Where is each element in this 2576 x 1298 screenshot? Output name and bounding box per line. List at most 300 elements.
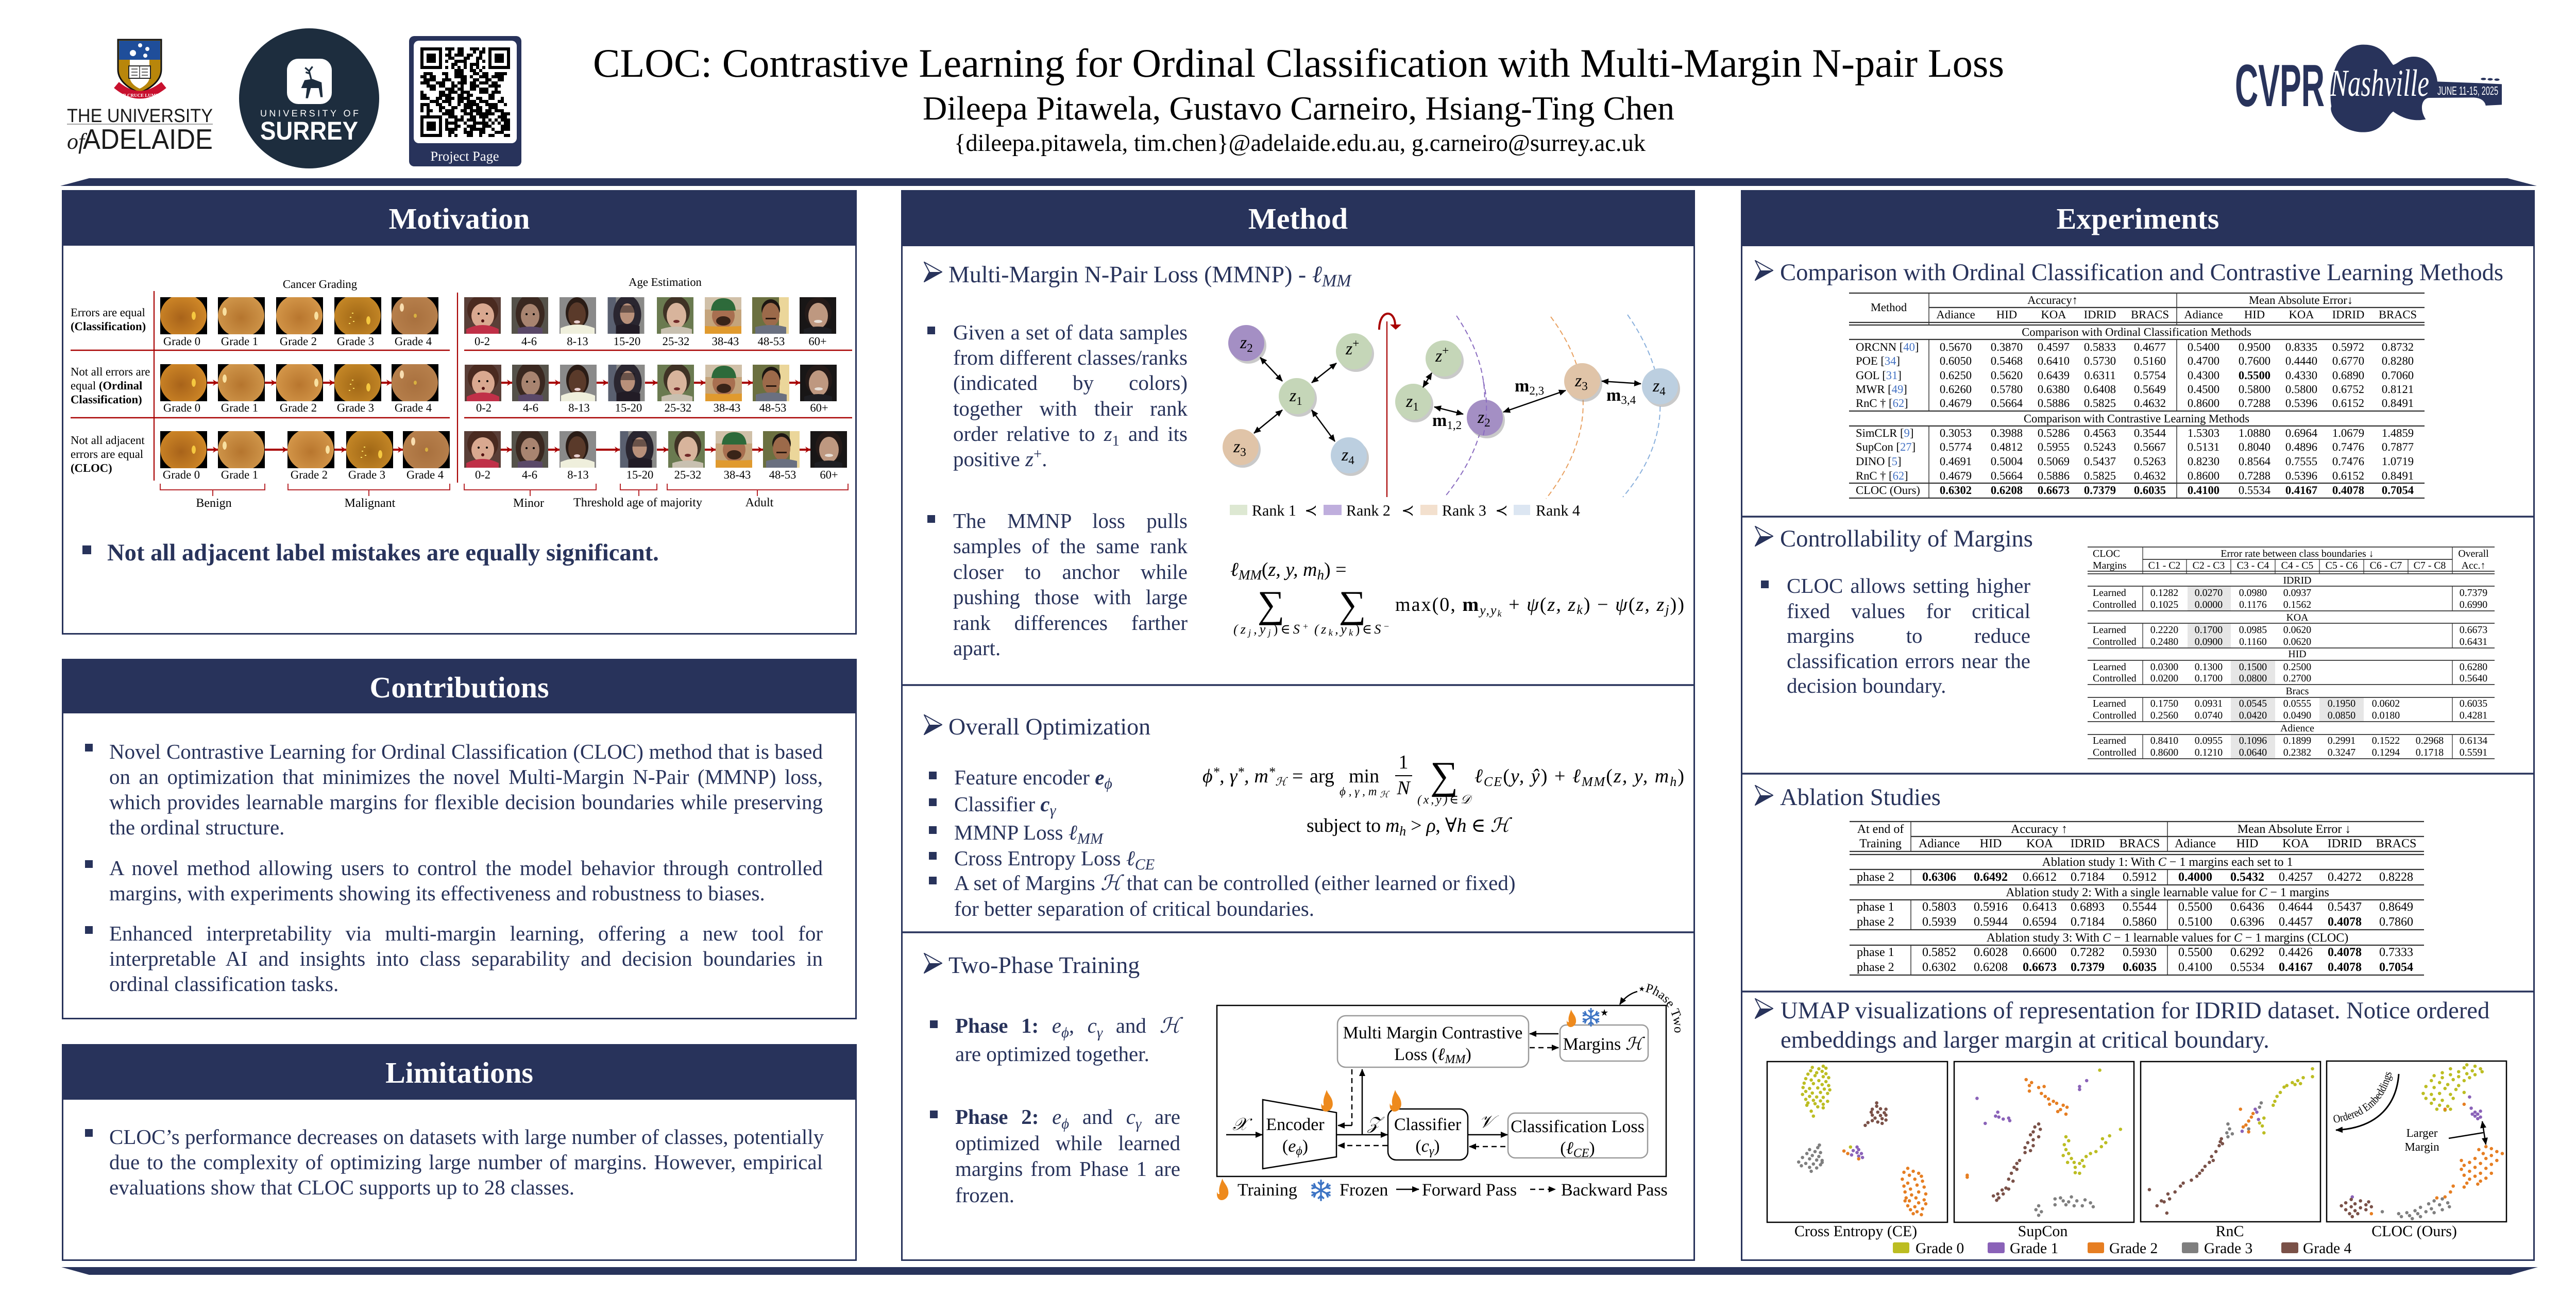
list: optimization components: MM	[1077, 830, 1104, 847]
table: error rate between class boundaries: 0.2968	[2416, 735, 2444, 746]
row labels: Classification)	[71, 393, 142, 406]
image labels: Grade 1	[221, 468, 258, 481]
equation: overall objective: ℓ	[1475, 765, 1483, 787]
equation: overall objective: ρ, ∀h ∈ ℋ	[1426, 815, 1510, 836]
motivation figure: cancer grading and age estimation	[71, 276, 852, 566]
text: MMNP bullet 2	[953, 508, 1188, 661]
table: ablation studies: 0.6612	[2023, 870, 2057, 884]
table: comparison	[1849, 293, 2425, 498]
table: ablation studies: 0.6594	[2023, 915, 2057, 929]
table: error rate between class boundaries: KOA	[2286, 612, 2309, 623]
brace labels: Malignant	[345, 497, 396, 510]
text: controllability bullet: classification errors near the	[1787, 649, 2030, 673]
table: comparison: 1.0880	[2239, 426, 2270, 439]
table: error rate between class boundaries: 0.8410	[2150, 735, 2178, 746]
table: comparison: 0.4632	[2134, 397, 2166, 409]
equation: MMNP loss: +	[1302, 621, 1309, 631]
equation: overall objective	[1202, 752, 1684, 839]
table: comparison: MWR [49]	[1856, 383, 1907, 396]
diagram: samples before loss: 3	[1240, 446, 1246, 458]
table: comparison: 0.9500	[2239, 340, 2270, 353]
table: error rate between class boundaries: 0.0740	[2195, 710, 2223, 721]
text: contribution 2: A novel method allowing users to control the model behavior through controlled	[109, 856, 823, 880]
equation: overall objective: CE	[1484, 774, 1502, 789]
table: ablation studies: 0.7184	[2071, 870, 2105, 884]
emails: {dileepa.pitawela, tim.chen}@adelaide.edu.au, g.carneiro@surrey.ac.uk	[954, 130, 1646, 157]
list: optimization components: Classifier c	[954, 792, 1050, 816]
equation: MMNP loss: ,y	[1335, 622, 1347, 637]
logo: University of Surrey	[239, 28, 379, 168]
table: ablation studies: 0.4078	[2328, 946, 2362, 959]
heading: contributions	[62, 659, 857, 713]
table: error rate between class boundaries: 0.0931	[2195, 698, 2223, 709]
text: contribution 1: Novel Contrastive Learning for Ordinal Classification (CLOC) method that is based	[109, 740, 823, 763]
flow diagram: two-phase training: Margins ℋ	[1563, 1035, 1646, 1054]
table: ablation studies: BRACS	[2376, 837, 2416, 850]
subheading: UMAP visualizations	[1755, 997, 2489, 1053]
table: error rate between class boundaries: 0.1700	[2195, 624, 2223, 636]
experiments content	[1741, 190, 2535, 1261]
table: comparison: 0.6152	[2332, 397, 2364, 409]
text: contribution 3: Enhanced interpretability via multi-margin learning, offering a new tool for	[109, 921, 823, 945]
logo: CVPR Nashville: JUNE 11-15, 2025	[2437, 84, 2498, 97]
table: comparison: 0.4500	[2188, 383, 2219, 396]
equation: overall objective: arg	[1310, 765, 1334, 787]
table: comparison: 0.6035	[2134, 484, 2166, 497]
table: comparison: 1.0679	[2332, 426, 2364, 439]
text: MMNP bullet 1: (indicated by colors)	[953, 371, 1188, 395]
table: comparison: 0.5780	[1991, 383, 2023, 396]
table: error rate between class boundaries: 0.0200	[2150, 673, 2178, 684]
table: comparison: 1.4859	[2382, 426, 2414, 439]
table: comparison: 0.7476	[2332, 455, 2364, 468]
equation: overall objective: *	[1238, 764, 1244, 779]
table: comparison: 0.6152	[2332, 469, 2364, 482]
key message: Not all adjacent label mistakes are equally significant.	[107, 539, 659, 566]
list: optimization components: for better separation of critical boundaries.	[954, 897, 1314, 920]
row labels: Not all adjacent	[71, 434, 145, 447]
table: error rate between class boundaries: 0.2991	[2328, 735, 2355, 746]
image labels: 25-32	[674, 468, 701, 481]
image labels: 15-20	[614, 335, 640, 348]
row labels: errors are equal	[71, 448, 143, 460]
table: comparison: 0.4691	[1940, 455, 1972, 468]
flow diagram: two-phase training: )	[1434, 1137, 1440, 1156]
bullet	[85, 1129, 93, 1137]
table: error rate between class boundaries: 0.1300	[2195, 661, 2223, 673]
table: error rate between class boundaries: Margins	[2093, 560, 2127, 571]
legend: training modes	[1217, 1179, 1668, 1201]
table: ablation studies: 0.5930	[2123, 946, 2157, 959]
table: ablation studies: 0.5912	[2123, 870, 2157, 884]
table: comparison: SimCLR [9]	[1856, 426, 1913, 439]
table: comparison: 0.5400	[2188, 340, 2219, 353]
text: phase 1	[955, 1012, 1180, 1068]
table: error rate between class boundaries: Controlled	[2093, 599, 2137, 610]
plot captions: RnC	[2215, 1223, 2244, 1240]
equation: overall objective: *	[1213, 764, 1219, 779]
table: comparison: 0.6964	[2285, 426, 2317, 439]
table: comparison: 0.5263	[2134, 455, 2166, 468]
table: comparison: 0.3053	[1940, 426, 1972, 439]
annotation: larger margin: Larger	[2406, 1126, 2438, 1139]
equation: overall objective: ϕ,γ,m	[1340, 785, 1377, 798]
table: comparison: 0.4679	[1940, 397, 1972, 409]
diagram: samples before loss: 2	[1247, 341, 1253, 354]
text: contribution 1: on an optimization that minimizes the novel Multi-Margin N-Pair (MMNP) loss,	[109, 765, 823, 789]
table: ablation studies: phase 2	[1857, 915, 1894, 929]
table: error rate between class boundaries: 0.0955	[2195, 735, 2223, 746]
table: error rate between class boundaries: HID	[2288, 648, 2307, 660]
table: ablation studies: 0.5860	[2123, 915, 2157, 929]
table: comparison: 0.5972	[2332, 340, 2364, 353]
image labels: Grade 1	[221, 335, 258, 348]
panel: limitations	[62, 1044, 857, 1261]
equation: MMNP loss: ψ(z, z	[1615, 594, 1664, 616]
image labels: 8-13	[567, 468, 589, 481]
table: comparison: 0.5774	[1940, 440, 1972, 453]
text: MMNP bullet 1: order relative to z1 and its	[953, 422, 1188, 449]
plot captions	[1794, 1223, 2457, 1240]
table: ablation studies: 0.6292	[2230, 946, 2264, 959]
table: ablation studies	[1850, 822, 2424, 975]
table: comparison: 0.5500	[2239, 369, 2270, 382]
table: comparison: KOA	[2041, 308, 2066, 321]
table: ablation studies: 0.6893	[2071, 900, 2105, 914]
table: comparison: 0.5825	[2084, 469, 2116, 482]
image labels: 0-2	[476, 401, 492, 414]
flow diagram: two-phase training: Encoder	[1266, 1115, 1325, 1134]
brace labels: Minor	[513, 497, 544, 510]
image labels: 15-20	[626, 468, 653, 481]
text: MMNP bullet 2: pushing those with large	[953, 585, 1188, 609]
image labels: 60+	[810, 401, 828, 414]
diagram: samples after loss with margins: z	[1653, 377, 1659, 396]
row labels: Errors are equal	[71, 306, 145, 319]
table: comparison: BRACS	[2379, 308, 2417, 321]
image labels: 38-43	[712, 335, 739, 348]
table: ablation studies: At end of	[1857, 823, 1904, 836]
equation: overall objective: 1	[1398, 752, 1409, 773]
image labels: 4-6	[522, 468, 537, 481]
table: comparison: 0.7288	[2239, 397, 2270, 409]
image labels: Grade 0	[163, 335, 200, 348]
red order arrows	[207, 383, 810, 450]
table: comparison: Mean Absolute Error↓	[2249, 294, 2353, 306]
table: comparison: CLOC (Ours)	[1856, 484, 1920, 497]
plot frames	[1767, 1061, 2506, 1222]
table: error rate between class boundaries: 0.7379	[2460, 587, 2487, 599]
table: comparison: 0.5955	[2038, 440, 2070, 453]
list: optimization components	[929, 765, 1515, 920]
text: phase 2: Phase 2: eϕ and cγ are	[955, 1105, 1180, 1132]
logo: University of Surrey: SURREY	[260, 116, 358, 145]
image labels	[163, 335, 838, 481]
equation: overall objective: *	[1268, 764, 1275, 779]
heading: contributions: Contributions	[369, 671, 549, 704]
equation: overall objective: ϕ	[1202, 765, 1213, 787]
subheading: UMAP visualizations: embeddings and larger margin at critical boundary.	[1781, 1027, 2269, 1053]
legend: ranks	[1230, 502, 1580, 519]
diagram: samples before loss: 4	[1348, 454, 1354, 467]
table: error rate between class boundaries: 0.0300	[2150, 661, 2178, 673]
plot captions: Cross Entropy (CE)	[1794, 1223, 1917, 1240]
logo: CVPR Nashville: CVPR	[2235, 52, 2325, 119]
table: comparison: 0.4300	[2188, 369, 2219, 382]
title: CLOC: Contrastive Learning for Ordinal Classification with Multi-Margin N-pair Loss	[593, 41, 2004, 86]
table: comparison: 0.8491	[2382, 469, 2414, 482]
flow diagram: two-phase training: 𝒳	[1232, 1115, 1252, 1134]
text: contribution 3	[109, 921, 823, 996]
text: limitation	[109, 1125, 824, 1199]
diagram: samples before loss: z	[1346, 339, 1352, 358]
equation: overall objective: , γ	[1219, 765, 1238, 787]
flow diagram: two-phase training: CE	[1573, 1147, 1589, 1160]
brace labels: Benign	[196, 497, 232, 510]
bullets	[85, 744, 93, 934]
table: ablation studies: 0.8649	[2379, 900, 2413, 914]
table: comparison: 0.3870	[1991, 340, 2023, 353]
table: error rate between class boundaries: 0.0900	[2195, 636, 2223, 647]
table: error rate between class boundaries: 0.1210	[2195, 747, 2223, 758]
table: comparison: 0.7600	[2239, 354, 2270, 367]
flow diagram: two-phase training	[1216, 984, 1681, 1177]
equation: MMNP loss: ,y	[1253, 622, 1266, 637]
table: error rate between class boundaries: 0.1718	[2416, 747, 2444, 758]
plot captions: CLOC (Ours)	[2371, 1223, 2457, 1240]
legend: ranks: Rank 4	[1536, 502, 1580, 519]
table: comparison: 0.5243	[2084, 440, 2116, 453]
table: error rate between class boundaries: 0.0800	[2239, 673, 2267, 684]
diagram: samples after loss with margins: m	[1515, 377, 1529, 396]
diagram: samples after loss with margins: 3,4	[1621, 394, 1636, 406]
table: error rate between class boundaries: 0.0980	[2239, 587, 2267, 599]
text: controllability bullet: decision boundary.	[1787, 674, 1946, 697]
diagram: samples before loss: z	[1240, 333, 1247, 352]
text: contribution 1: which provides learnable margins for flexible decision boundaries while preserving	[109, 790, 823, 814]
logo: University of Adelaide: ADELAIDE	[83, 123, 213, 155]
equation: MMNP loss: k	[1349, 627, 1353, 638]
table: error rate between class boundaries: 0.4281	[2460, 710, 2487, 721]
table: comparison: 0.4677	[2134, 340, 2166, 353]
image labels: 4-6	[521, 335, 537, 348]
image labels: Grade 2	[280, 335, 317, 348]
image labels: 48-53	[769, 468, 796, 481]
table: comparison: 0.3544	[2134, 426, 2166, 439]
flow diagram: two-phase training: MM	[1444, 1053, 1466, 1066]
diagram: samples after loss with margins: 2,3	[1529, 384, 1544, 397]
table: error rate between class boundaries: Controlled	[2093, 710, 2137, 721]
legend: ranks: Rank 2	[1346, 502, 1391, 519]
image labels: 0-2	[475, 468, 490, 481]
subheading: MMNP loss: Multi-Margin N-Pair Loss (MMNP) - ℓ	[948, 261, 1322, 287]
table: comparison: 0.8600	[2188, 469, 2219, 482]
diagram: samples after loss with margins: +	[1442, 344, 1449, 357]
table: error rate between class boundaries: 0.0000	[2195, 599, 2223, 610]
table: ablation studies: 0.8228	[2379, 870, 2413, 884]
image labels: Grade 3	[348, 468, 385, 481]
table: comparison: Method	[1871, 301, 1907, 314]
table: error rate between class boundaries: C6 - C7	[2370, 560, 2402, 571]
table: ablation studies: 0.5534	[2230, 961, 2264, 974]
table: error rate between class boundaries: 0.5640	[2460, 673, 2487, 684]
equation: overall objective: >	[1406, 815, 1427, 836]
equation: MMNP loss: max(0, m	[1395, 594, 1479, 616]
equation: overall objective: min	[1349, 765, 1379, 787]
equation: overall objective: z, y, m	[1613, 765, 1669, 787]
chart: RnC scatter	[2149, 1069, 2313, 1213]
table: error rate between class boundaries: 0.6035	[2460, 698, 2487, 709]
table: ablation studies: Accuracy ↑	[2011, 823, 2067, 836]
equation: MMNP loss: (	[1262, 559, 1268, 580]
list: optimization components: A set of Margins ℋ that can be controlled (either learned or fixed)	[954, 871, 1515, 895]
table: ablation studies: phase 2	[1857, 961, 1894, 974]
heading: motivation: Motivation	[389, 202, 530, 235]
text: MMNP bullet 2: apart.	[953, 636, 1001, 660]
table: error rate between class boundaries: 0.2220	[2150, 624, 2178, 636]
text: phase 1: are optimized together.	[955, 1042, 1149, 1066]
table: comparison: 0.6050	[1940, 354, 1972, 367]
diagram: samples after loss with margins: z	[1435, 347, 1442, 366]
brace labels: Threshold age of majority	[573, 496, 702, 509]
table: comparison: 0.7054	[2382, 484, 2414, 497]
table: ablation studies: 0.6436	[2230, 900, 2264, 914]
table: error rate between class boundaries: Error rate between class boundaries ↓	[2221, 548, 2374, 559]
QR code: project page: Project Page	[430, 148, 499, 164]
table: ablation studies: 0.4644	[2279, 900, 2313, 914]
table: ablation studies: 0.5944	[1974, 915, 2008, 929]
logo: University of Adelaide	[67, 40, 213, 155]
table: ablation studies: HID	[1980, 837, 2002, 850]
table: error rate between class boundaries: 0.1176	[2239, 599, 2267, 610]
table: comparison: 0.8491	[2382, 397, 2414, 409]
diagram: samples before loss: z	[1342, 446, 1348, 465]
text: contribution 1: the ordinal structure.	[109, 815, 284, 839]
table: ablation studies: Mean Absolute Error ↓	[2238, 823, 2351, 836]
table: comparison: 0.7476	[2332, 440, 2364, 453]
text: phase 1: Phase 1: eϕ, cγ and ℋ	[955, 1014, 1180, 1041]
table: error rate between class boundaries: C1 - C2	[2148, 560, 2180, 571]
table: error rate between class boundaries: 0.0270	[2195, 587, 2223, 599]
table: comparison: SupCon [27]	[1856, 440, 1916, 453]
table: error rate between class boundaries: 0.5591	[2460, 747, 2487, 758]
image labels: Grade 3	[337, 401, 374, 414]
table: comparison: 0.8280	[2382, 354, 2414, 367]
equation: MMNP loss: +	[1503, 594, 1526, 616]
column titles	[283, 276, 702, 291]
flow diagram: two-phase training: 𝒵	[1367, 1114, 1385, 1133]
text: MMNP bullet 2: samples of the same rank	[953, 534, 1188, 558]
text: phase 2: frozen.	[955, 1183, 1014, 1206]
legend: training modes: Forward Pass	[1422, 1181, 1517, 1200]
image labels: 25-32	[663, 335, 689, 348]
divider with flip arrow	[1379, 314, 1401, 497]
table: error rate between class boundaries: 0.1025	[2150, 599, 2178, 610]
table: error rate between class boundaries: 0.3247	[2328, 747, 2355, 758]
equation: MMNP loss: j	[1664, 602, 1669, 617]
table: comparison: 0.4812	[1991, 440, 2023, 453]
table: ablation studies: 0.5939	[1922, 915, 1956, 929]
diagram: samples before loss: 1	[1296, 395, 1302, 407]
table: comparison: 0.8121	[2382, 383, 2414, 396]
table: comparison: 0.5825	[2084, 397, 2116, 409]
legend: ranks: Rank 3	[1442, 502, 1486, 519]
legend: ranks: ≺	[1495, 502, 1508, 519]
table: ablation studies: 0.5437	[2328, 900, 2362, 914]
table: error rate between class boundaries: Learned	[2093, 698, 2126, 709]
table: error rate between class boundaries: Controlled	[2093, 673, 2137, 684]
table: error rate between class boundaries: 0.0620	[2283, 624, 2311, 636]
table: ablation studies: Adiance	[2175, 837, 2216, 850]
image labels: Grade 4	[395, 401, 432, 414]
flow diagram: two-phase training: )	[1589, 1139, 1595, 1158]
table: comparison: 0.7877	[2382, 440, 2414, 453]
table: comparison: 0.7379	[2084, 484, 2116, 497]
text: contribution 2: margins, with experiments showing its effectiveness and robustness to biases.	[109, 881, 765, 905]
table: error rate between class boundaries: Controlled	[2093, 636, 2137, 647]
brace labels: Adult	[745, 496, 774, 509]
table: comparison: 0.3988	[1991, 426, 2023, 439]
subheading: ablation: Ablation Studies	[1780, 784, 1941, 811]
flow diagram: two-phase training: (c	[1415, 1137, 1429, 1156]
table: ablation studies: 0.5852	[1922, 946, 1956, 959]
equation: overall objective: y, ŷ) + ℓ	[1511, 765, 1581, 787]
text: MMNP bullet 1	[953, 320, 1188, 472]
table: comparison: 0.4330	[2285, 369, 2317, 382]
row labels: equal (Ordinal	[71, 379, 142, 392]
text: MMNP bullet 1: from different classes/ranks	[953, 346, 1188, 369]
equation: MMNP loss: k	[1329, 627, 1333, 638]
text: MMNP bullet 2: closer to anchor while	[953, 560, 1188, 584]
table: comparison: Adiance	[2184, 308, 2223, 321]
equation: overall objective: (	[1503, 765, 1510, 787]
subheading: two-phase training: Two-Phase Training	[948, 952, 1140, 978]
logo: University of Adelaide: SUB CRUCE LUMEN	[117, 93, 162, 98]
bullets	[927, 327, 935, 523]
table: comparison: 0.5160	[2134, 354, 2166, 367]
diagram: samples after loss with margins: 1,2	[1447, 419, 1462, 432]
table: comparison: 0.6673	[2038, 484, 2070, 497]
equation: overall objective: )	[1677, 765, 1684, 787]
table: comparison: Comparison with Ordinal Classification Methods	[2022, 326, 2251, 338]
table: comparison: 0.6250	[1940, 369, 1972, 382]
table: error rate between class boundaries: 0.8600	[2150, 747, 2178, 758]
table: error rate between class boundaries: CLOC	[2093, 548, 2120, 559]
table: comparison: 0.4167	[2285, 484, 2317, 497]
table: error rate between class boundaries: 0.0937	[2283, 587, 2311, 599]
text: MMNP bullet 1: Given a set of data samples	[953, 320, 1188, 344]
table: error rate between class boundaries: C7 - C8	[2414, 560, 2446, 571]
equation: overall objective: subject to m	[1307, 815, 1399, 836]
equation: MMNP loss: (z	[1233, 622, 1246, 637]
equation: overall objective: h	[1399, 824, 1406, 839]
diagram: samples after loss with margins: m	[1606, 386, 1621, 405]
table: error rate between class boundaries: 0.0490	[2283, 710, 2311, 721]
table: error rate between class boundaries: 0.1500	[2239, 661, 2267, 673]
table: comparison: 0.4632	[2134, 469, 2166, 482]
text: MMNP bullet 2: rank differences farther	[953, 611, 1188, 635]
table: comparison: 0.7555	[2285, 455, 2317, 468]
equation: overall objective: ℋ	[1380, 790, 1390, 799]
table: ablation studies: KOA	[2026, 837, 2054, 850]
braces	[160, 484, 848, 496]
table: ablation studies: 0.4257	[2279, 870, 2313, 884]
table: error rate between class boundaries: Learned	[2093, 735, 2126, 746]
list: optimization components: Feature encoder e	[954, 765, 1104, 789]
equation: MMNP loss: ψ(z, z	[1527, 594, 1575, 616]
text: phase 2: optimized while learned	[955, 1131, 1180, 1155]
table: error rate between class boundaries: Acc.↑	[2462, 560, 2485, 571]
